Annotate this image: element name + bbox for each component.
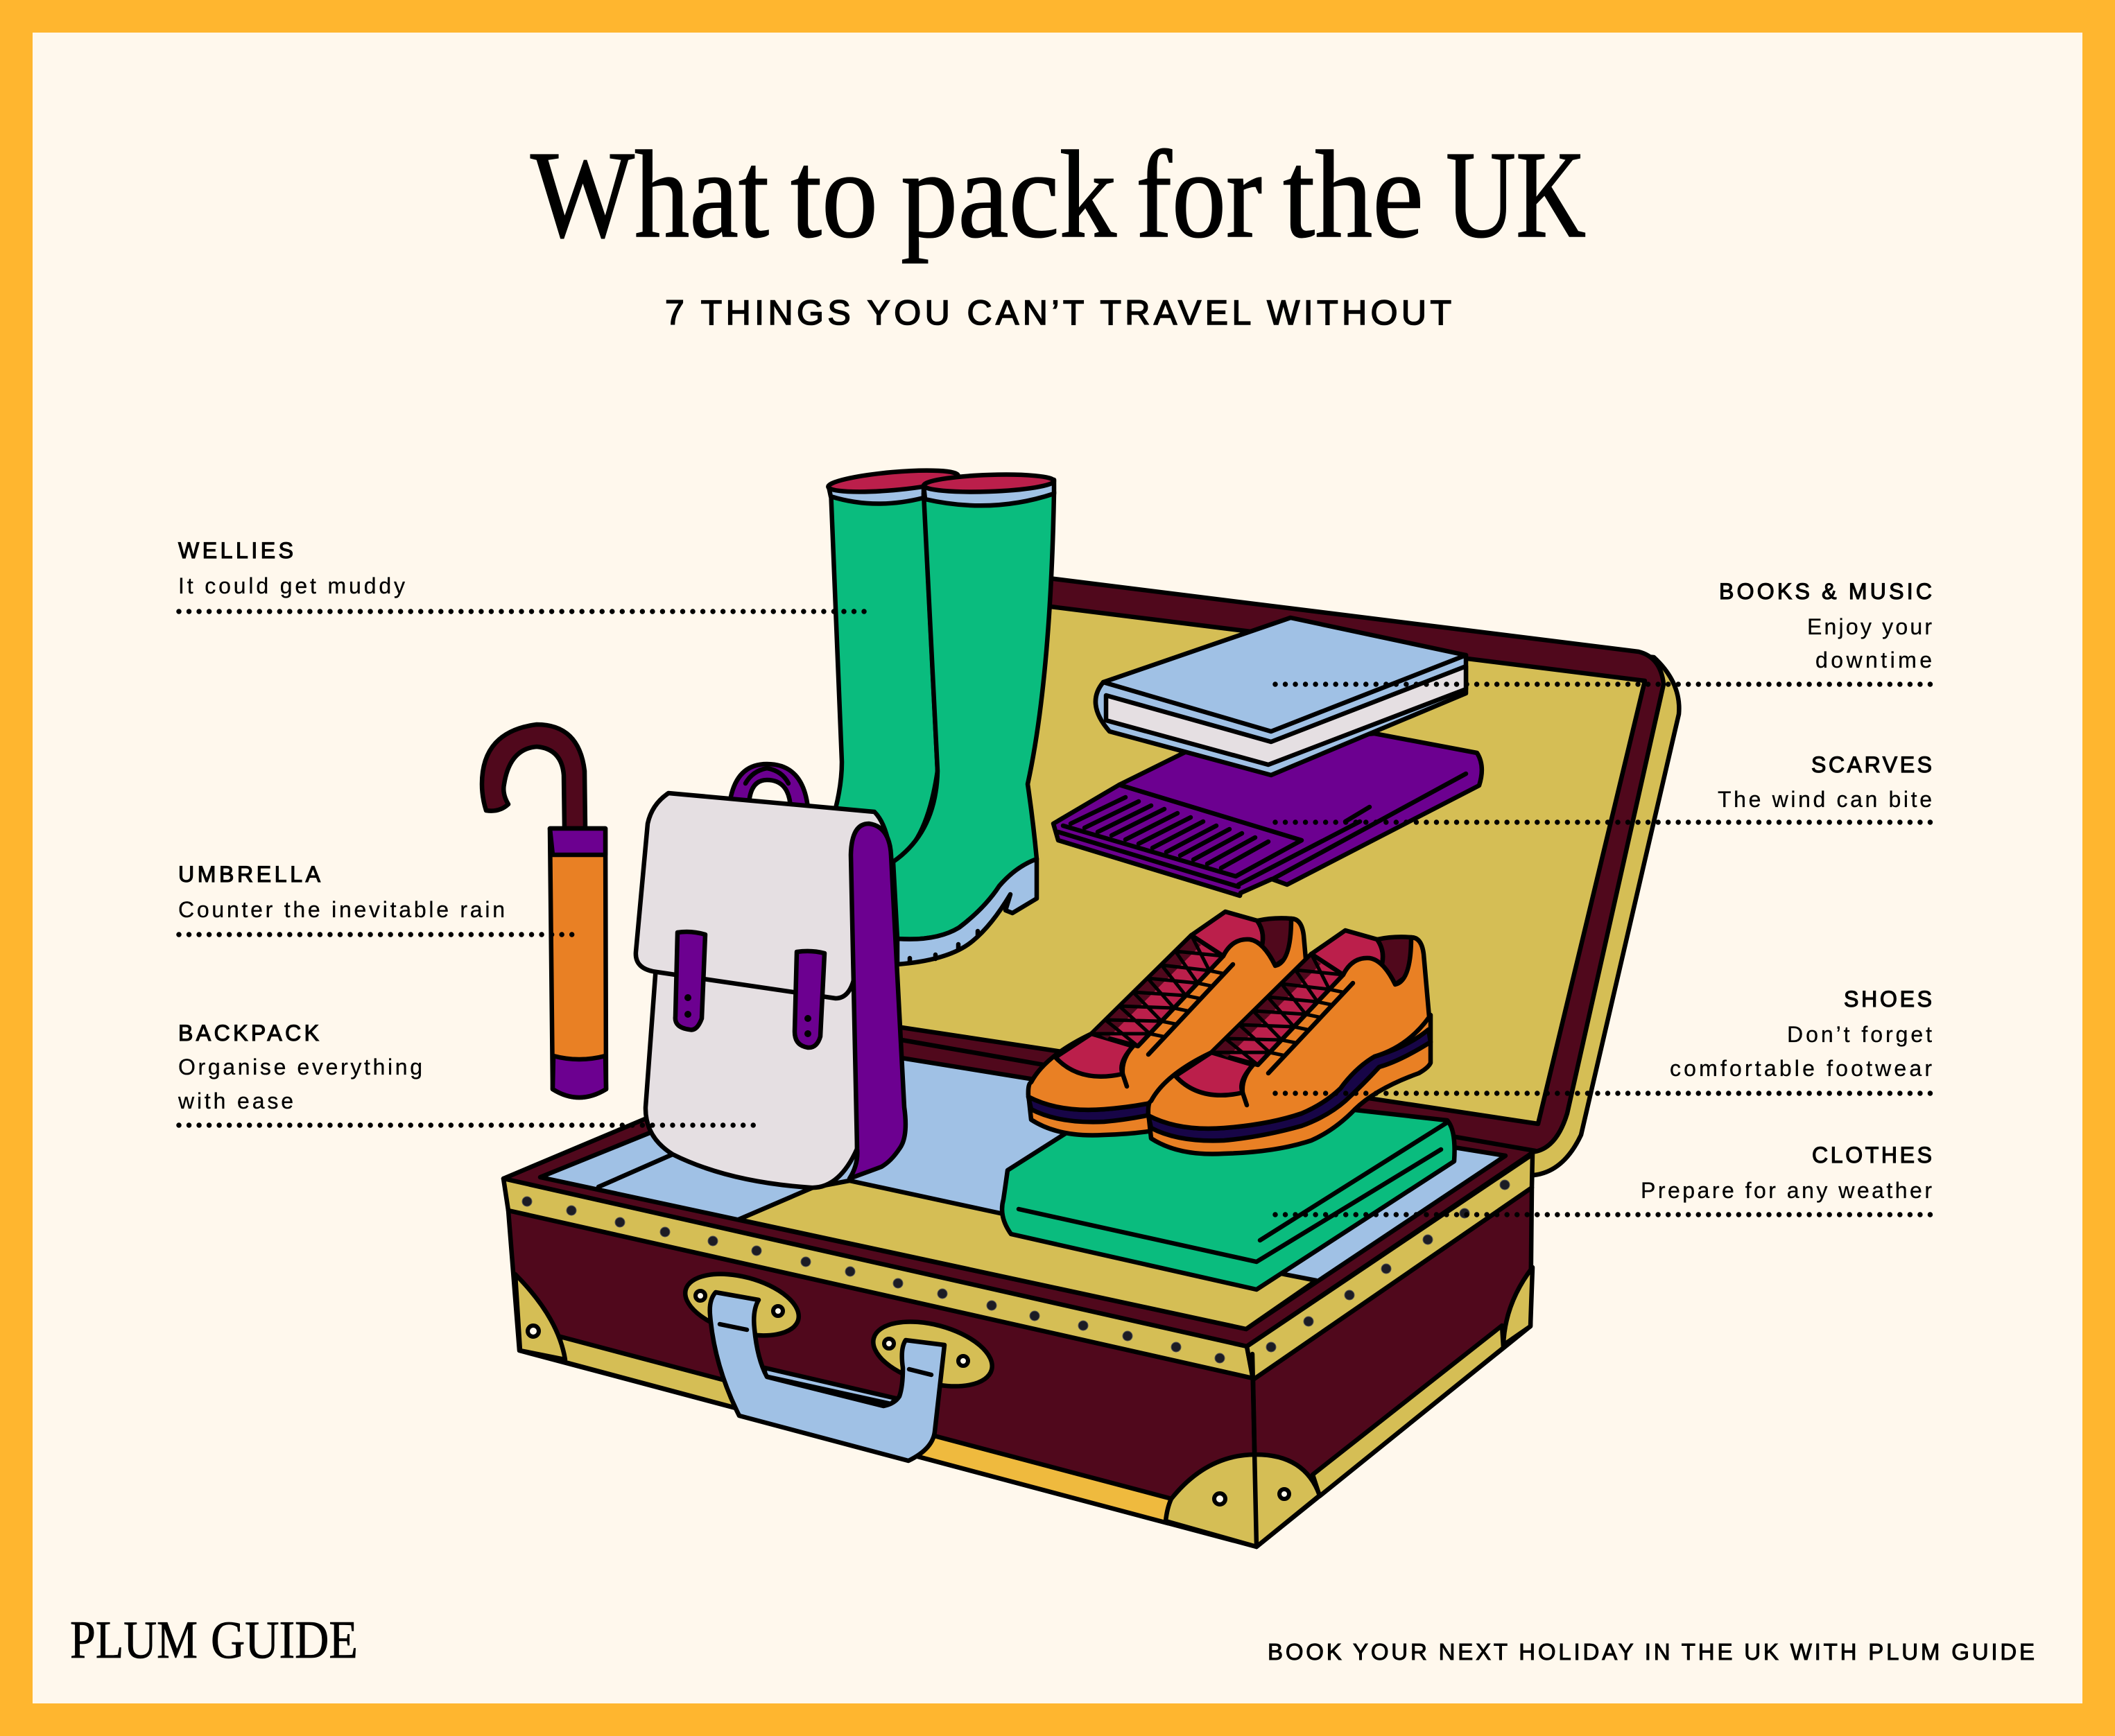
label: umbrella [178, 862, 576, 935]
title: What [530, 125, 769, 263]
label: wellies: It could get muddy [178, 573, 405, 598]
label: umbrella: UMBRELLA [178, 862, 321, 887]
icon: shoes [1028, 912, 1431, 1154]
label: wellies: WELLIES [178, 538, 293, 563]
label: scarves [1275, 752, 1933, 822]
logo: plum guide: GUIDE [211, 1610, 358, 1669]
label: shoes: SHOES [1844, 987, 1932, 1012]
logo: plum guide: PLUM [70, 1610, 198, 1669]
label: wellies [178, 538, 867, 611]
icon: clothes [1002, 1110, 1455, 1290]
suitcase lid [874, 568, 1679, 1175]
label: clothes: CLOTHES [1812, 1143, 1932, 1168]
label: books and music [1275, 579, 1933, 684]
label: shoes: comfortable footwear [1670, 1056, 1932, 1081]
title: pack [901, 125, 1116, 263]
icon: wellies [827, 467, 1054, 964]
icon: book [1096, 618, 1466, 775]
footer call to action: BOOK YOUR NEXT HOLIDAY IN THE UK WITH PLUM GUIDE [1268, 1639, 2035, 1665]
label: scarves: SCARVES [1811, 752, 1932, 777]
label: clothes [1275, 1143, 1933, 1215]
left strap [675, 932, 705, 1030]
label: umbrella: Counter the inevitable rain [178, 897, 505, 922]
title: UK [1446, 125, 1586, 263]
label: backpack: Organise everything [178, 1054, 422, 1079]
label: backpack [178, 1021, 756, 1125]
right face [1253, 1188, 1532, 1547]
label: books and music: BOOKS & MUSIC [1719, 579, 1932, 604]
sole [897, 859, 1037, 964]
right strap [795, 951, 825, 1048]
handle plates [679, 1263, 999, 1398]
corner caps [515, 1274, 565, 1360]
cap rivets [528, 1326, 1289, 1504]
label: shoes [1275, 987, 1933, 1093]
rivet band right [1247, 1154, 1533, 1380]
rivets [522, 1180, 1510, 1363]
label: books and music: Enjoy your [1807, 614, 1932, 639]
front face [508, 1210, 1257, 1547]
title: the [1283, 125, 1424, 263]
bottom strips [560, 1337, 832, 1434]
rim and interior [503, 1040, 1535, 1346]
rivet band front [503, 1179, 1253, 1378]
suitcase base [503, 1040, 1535, 1547]
logo: plum guide [70, 1610, 358, 1669]
subtitle: 7 THINGS YOU CAN’T TRAVEL WITHOUT [665, 293, 1451, 332]
title: to [791, 125, 878, 263]
handle [710, 1292, 944, 1461]
icon: backpack [636, 764, 906, 1188]
icon: umbrella [482, 724, 606, 1097]
title: for [1136, 125, 1262, 263]
left boot [831, 488, 938, 862]
right boot [893, 492, 1054, 939]
label: shoes: Don’t forget [1787, 1022, 1932, 1047]
label: scarves: The wind can bite [1718, 787, 1932, 812]
icon: scarves [1053, 734, 1482, 896]
label: backpack: with ease [178, 1088, 293, 1113]
label: backpack: BACKPACK [178, 1021, 319, 1045]
fringe [1071, 797, 1268, 868]
label: clothes: Prepare for any weather [1641, 1178, 1932, 1203]
label: books and music: downtime [1815, 648, 1932, 672]
title [530, 125, 1586, 263]
